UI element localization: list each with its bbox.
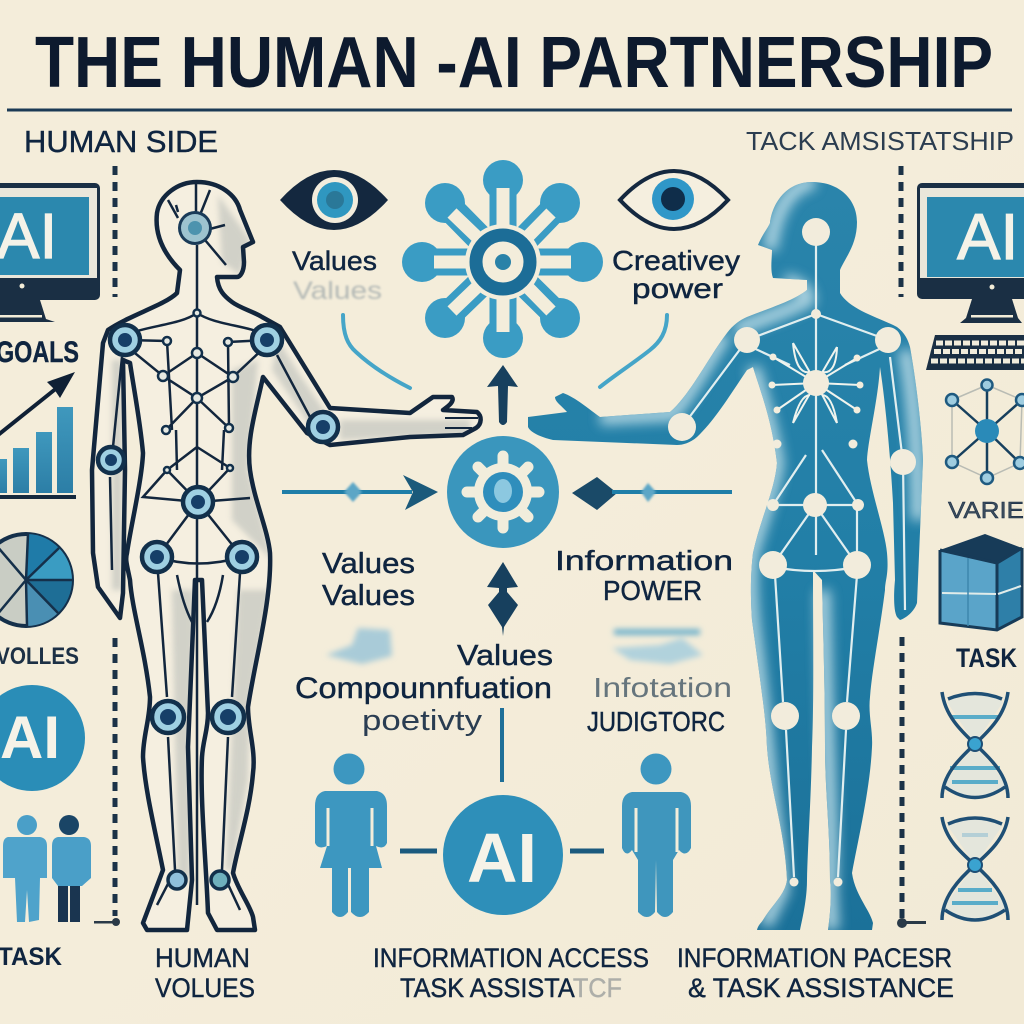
arrow: up to hub [487, 365, 518, 425]
icon: right AI monitor: AI [957, 200, 1018, 273]
label: values: Values [293, 277, 382, 305]
icon: network nodes [946, 380, 1024, 484]
label: human values: HUMAN [155, 943, 250, 973]
icon: central gear [447, 436, 559, 548]
icon: cube [940, 534, 1022, 630]
head joint [178, 211, 212, 245]
icon: AI circle left [0, 685, 85, 791]
label: varie: VARIE [948, 497, 1024, 523]
label: communication positivity: poetivty [362, 705, 483, 737]
label: human values: VOLUES [155, 973, 255, 1003]
arrow: double vertical [487, 562, 518, 636]
icon: AI circle center [443, 795, 563, 915]
arrow: left to gear [282, 475, 438, 510]
label: creative power [612, 245, 740, 304]
label: human values [155, 943, 255, 1003]
icon: person left of AI [315, 754, 387, 917]
label: values values [322, 548, 415, 612]
label: information process [677, 943, 954, 1003]
label: information access [373, 943, 649, 1003]
chest star [768, 343, 864, 423]
body joints [98, 310, 338, 889]
icon: right AI monitor [917, 183, 1024, 323]
label: values values: Values [322, 580, 415, 612]
label: values values: Values [322, 548, 415, 580]
icon: left AI monitor [0, 183, 100, 322]
label: values center: Values [457, 640, 553, 672]
icon: network hub top [402, 160, 603, 358]
label: creative power: power [632, 273, 723, 304]
joints [668, 218, 916, 886]
finger lines [445, 418, 478, 428]
label: information power: POWER [603, 575, 702, 606]
label: communication positivity: Compounnfuation [295, 672, 552, 705]
AI figure [528, 182, 923, 930]
label: information access: TASK ASSISTATCF [400, 973, 622, 1003]
label: information power: Information [555, 545, 733, 576]
label: information power [555, 545, 733, 606]
blurred smudges [326, 628, 703, 664]
icon: AI circle left: AI [0, 704, 60, 771]
heading: task assistance right: TACK AMSISTATSHIP [746, 126, 1014, 156]
icon: eye left [280, 170, 388, 230]
network lines [682, 232, 905, 877]
icon: two small people [3, 815, 91, 922]
label: information judgment: Infotation [593, 672, 732, 703]
heading: human side: HUMAN SIDE [24, 124, 218, 159]
icon: eye right [620, 171, 728, 229]
label: information judgment: JUDIGTORC [587, 706, 725, 737]
icon: keyboard [926, 335, 1024, 370]
label: information process: INFORMATION PACESR [677, 943, 952, 973]
arrows: pointers to hub [343, 315, 667, 388]
label: values [292, 246, 382, 305]
chart: pie [0, 534, 72, 626]
human figure [92, 182, 481, 930]
label: information judgment [587, 672, 732, 737]
network lines [110, 182, 310, 910]
icon: AI circle center: AI [467, 819, 537, 897]
icon: DNA top [942, 692, 1008, 798]
chart: rising bars with arrow [0, 372, 76, 499]
label: creative power: Creativey [612, 245, 740, 276]
label: communication positivity [295, 672, 552, 737]
label: information process: & TASK ASSISTANCE [688, 973, 954, 1003]
icon: DNA bottom [942, 817, 1008, 920]
icon: person right of AI [622, 754, 691, 917]
arrow: right to gear [572, 477, 732, 510]
label: values: Values [292, 246, 377, 276]
label: information access: INFORMATION ACCESS [373, 943, 649, 973]
